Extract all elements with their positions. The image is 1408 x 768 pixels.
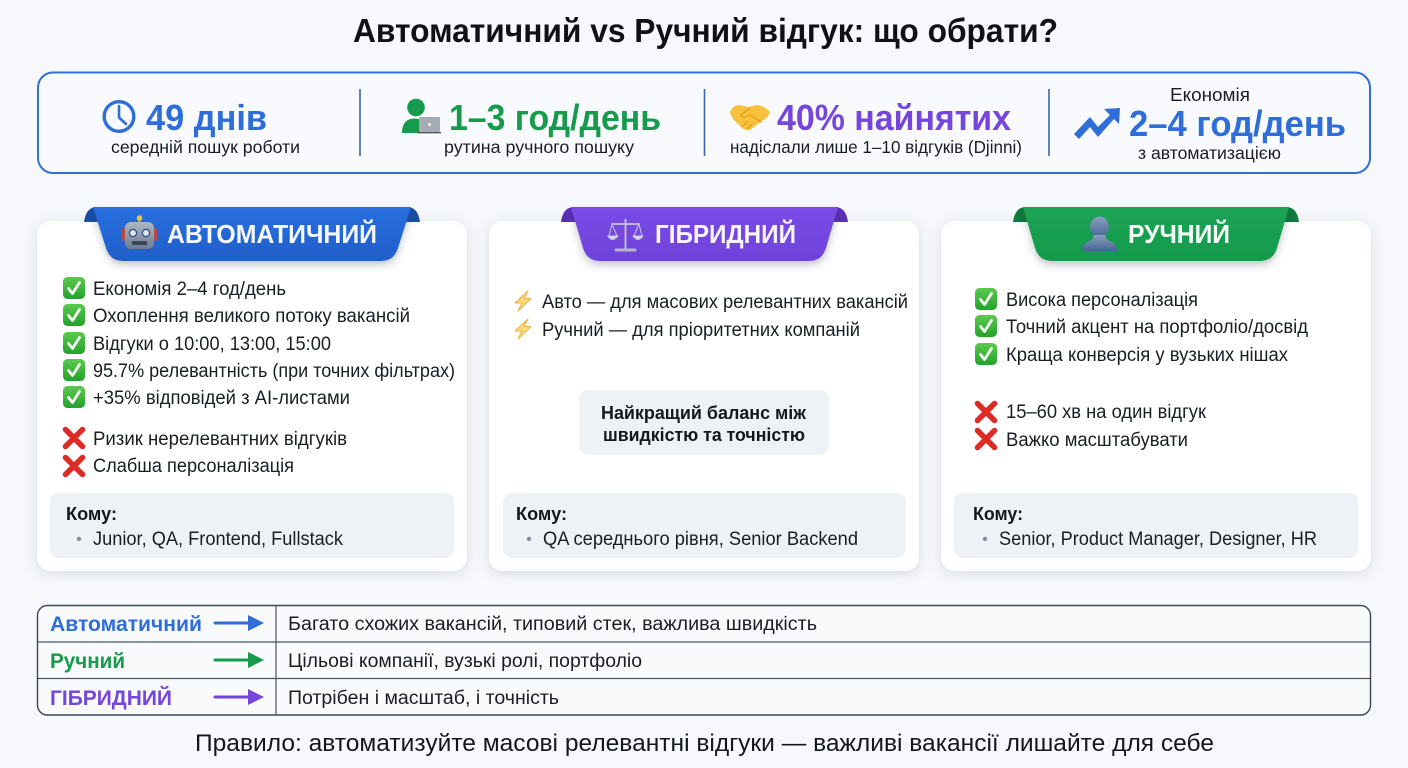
list: manual pros xyxy=(975,288,1308,366)
stat: 49 days xyxy=(104,97,300,157)
ribbon header: automatic: АВТОМАТИЧНИЙ xyxy=(167,219,377,249)
table row: automatic xyxy=(50,613,817,636)
ribbon header: manual xyxy=(1013,207,1299,261)
table row: automatic: Автоматичний xyxy=(50,613,202,636)
footer rule: Правило: автоматизуйте масові релевантні відгуки — важливі вакансії лишайте для себе xyxy=(195,730,1214,757)
audience box: hybrid xyxy=(503,493,906,558)
arrow head: purple xyxy=(248,689,264,705)
list: manual pros: Точний акцент на портфоліо/досвід xyxy=(1006,317,1308,338)
stat: 1-3 hours per day xyxy=(402,97,661,157)
stat: 1-3 hours per day: 1–3 год/день xyxy=(449,97,661,138)
audience box: automatic xyxy=(50,493,454,558)
list: manual cons: Важко масштабувати xyxy=(1006,430,1188,451)
list: manual cons xyxy=(978,402,1207,451)
panel: automatic xyxy=(37,207,467,571)
list: automatic cons xyxy=(66,429,347,477)
list: automatic cons: Слабша персоналізація xyxy=(93,456,294,477)
ribbon header: automatic xyxy=(84,207,420,261)
icon: rising arrow xyxy=(1074,108,1120,139)
stat: 40% hired: надіслали лише 1–10 відгуків (Djinni) xyxy=(730,137,1022,157)
callout: best balance xyxy=(579,390,829,455)
stat: 2-4 hours saved: 2–4 год/день xyxy=(1129,103,1346,144)
callout: best balance: швидкістю та точністю xyxy=(603,425,805,445)
panel: key statistics xyxy=(38,72,1370,173)
list: hybrid points: Ручний — для пріоритетних компаній xyxy=(542,320,860,341)
stat: 2-4 hours saved xyxy=(1074,85,1346,163)
list: manual pros: Краща конверсія у вузьких нішах xyxy=(1006,345,1288,366)
table row: hybrid: ГІБРИДНИЙ xyxy=(50,686,172,710)
audience box: manual: Senior, Product Manager, Designer, HR xyxy=(999,529,1317,550)
audience box: hybrid: Кому: xyxy=(516,504,567,524)
panel: manual xyxy=(941,207,1371,571)
table row: manual: Цільові компанії, вузькі ролі, портфоліо xyxy=(288,651,642,672)
stat: 2-4 hours saved: з автоматизацією xyxy=(1138,143,1281,163)
stat: 1-3 hours per day: рутина ручного пошуку xyxy=(444,137,634,157)
list: automatic pros: 95.7% релевантність (при точних фільтрах) xyxy=(93,361,455,382)
ribbon header: hybrid: ГІБРИДНИЙ xyxy=(655,219,796,249)
panel: hybrid xyxy=(489,207,919,571)
list: automatic pros: Економія 2–4 год/день xyxy=(93,279,286,300)
list: automatic pros: Охоплення великого потоку вакансій xyxy=(93,306,410,327)
stat: 2-4 hours saved: Економія xyxy=(1170,85,1250,105)
icon: handshake xyxy=(730,105,770,130)
stat: 40% hired: 40% найнятих xyxy=(777,97,1011,138)
table row: manual: Ручний xyxy=(50,650,125,673)
table row: hybrid: Потрібен і масштаб, і точність xyxy=(288,688,559,709)
stat: 40% hired xyxy=(730,97,1022,157)
audience box: manual xyxy=(954,493,1358,558)
audience box: automatic: Junior, QA, Frontend, Fullstack xyxy=(93,529,343,550)
icon: person silhouette xyxy=(1081,216,1118,251)
arrow: blue xyxy=(215,622,250,624)
list: manual cons: 15–60 хв на один відгук xyxy=(1006,402,1207,423)
callout: best balance: Найкращий баланс між xyxy=(601,403,806,423)
icon: clock xyxy=(104,102,134,131)
list: automatic pros: Відгуки о 10:00, 13:00, 15:00 xyxy=(93,334,331,355)
stat: 49 days: 49 днів xyxy=(146,97,267,138)
audience box: hybrid: QA середнього рівня, Senior Backend xyxy=(543,529,858,550)
stat: 49 days: середній пошук роботи xyxy=(111,137,300,157)
ribbon header: hybrid xyxy=(561,207,848,261)
table row: automatic: Багато схожих вакансій, типовий стек, важлива швидкість xyxy=(288,614,817,635)
icon: robot xyxy=(122,215,157,249)
list: automatic cons: Ризик нерелевантних відгуків xyxy=(93,429,347,450)
audience box: manual: Кому: xyxy=(973,504,1023,524)
decision table xyxy=(38,606,1370,715)
audience box: automatic: Кому: xyxy=(66,504,117,524)
list: automatic pros xyxy=(63,277,455,409)
arrow head: green xyxy=(248,652,264,668)
title: Автоматичний vs Ручний відгук: що обрати? xyxy=(353,12,1058,49)
ribbon header: manual: РУЧНИЙ xyxy=(1128,219,1230,249)
list: automatic pros: +35% відповідей з АІ-листами xyxy=(93,388,350,409)
list: hybrid points xyxy=(515,291,908,341)
icon: person with laptop xyxy=(402,99,441,133)
arrow: green xyxy=(215,658,250,662)
list: manual pros: Висока персоналізація xyxy=(1006,290,1198,311)
table row: manual xyxy=(50,650,642,673)
arrow head: blue xyxy=(248,615,264,631)
arrow: purple xyxy=(215,696,250,698)
list: hybrid points: Авто — для масових релевантних вакансій xyxy=(542,292,908,313)
table row: hybrid xyxy=(50,686,559,710)
icon: balance scale xyxy=(608,219,643,250)
